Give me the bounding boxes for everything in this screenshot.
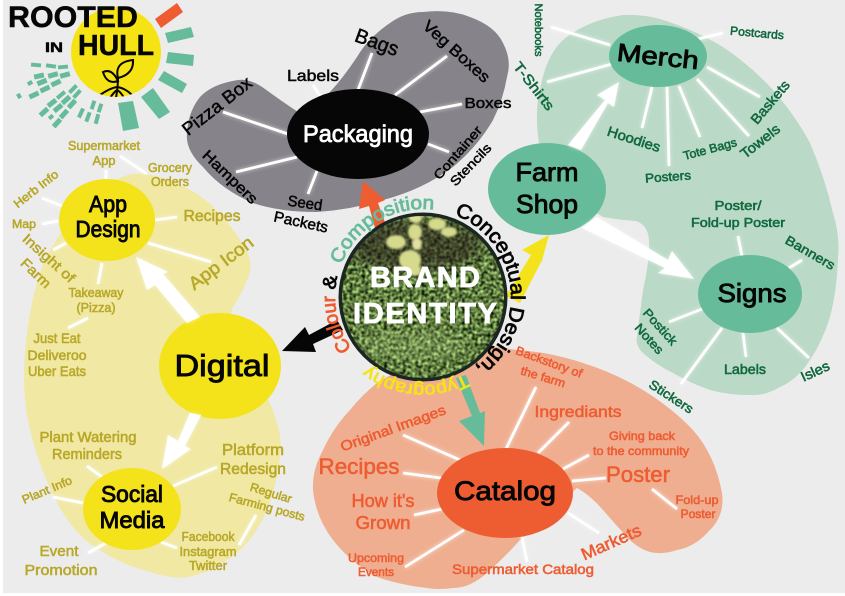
labels: merch: Hoodies [605, 123, 663, 155]
labels: catalog: Fold-up [676, 493, 719, 507]
labels: packaging: Labels [287, 68, 339, 85]
labels: catalog: the farm [519, 364, 567, 390]
connector lines: packaging [223, 53, 462, 194]
labels: packaging: Container [430, 122, 485, 182]
labels: social media: Instagram [180, 544, 236, 559]
labels: social media: Farming posts [228, 490, 306, 524]
labels: merch: Postcards [729, 24, 785, 42]
heading: brand identity: IDENTITY [353, 298, 497, 330]
arrow: brand identity to farm shop [506, 235, 549, 303]
labels: app design: Herb Info [11, 167, 61, 211]
arrow: farm shop to merch [568, 82, 619, 150]
labels: merch: Notebooks [532, 4, 544, 57]
curved label: ampersand: & [322, 276, 338, 290]
labels: merch: Baskets [747, 77, 793, 127]
labels: packaging: Pizza Box [178, 73, 256, 139]
labels: app design: Just Eat [34, 330, 81, 346]
labels: app design: Deliveroo [28, 347, 87, 363]
blob: digital background [24, 173, 281, 578]
labels: social media: Redesign [220, 461, 286, 478]
labels: app design: Orders [151, 174, 189, 189]
node: digital [159, 313, 281, 419]
node: packaging: Packaging [303, 121, 413, 148]
curved ring text [322, 196, 526, 395]
heading: brand identity: BRAND [370, 262, 480, 294]
curved label: typography: Typography [362, 366, 471, 395]
labels: signs: Banners [783, 232, 838, 273]
node: merch: Merch [616, 39, 700, 75]
heading: brand identity [353, 262, 497, 330]
labels: packaging [178, 18, 512, 237]
arrow: digital to social media [162, 413, 201, 469]
node: app design: App [89, 191, 127, 217]
orange sun ray [155, 3, 183, 28]
title text: IN [45, 39, 63, 55]
arrow: brand identity to packaging [359, 181, 386, 228]
connector lines: catalog [403, 387, 677, 567]
labels: social media: Facebook [182, 529, 235, 544]
labels: social media: Plant Watering [40, 430, 136, 446]
panel: farm shop [488, 4, 838, 417]
labels: social media: Event [40, 543, 79, 560]
logo: rooted in hull [8, 1, 194, 131]
labels: merch: Tote Bags [682, 135, 738, 163]
photo of moss plants [340, 210, 506, 380]
labels: catalog: Ingrediants [534, 404, 622, 421]
labels: signs: Notes [632, 321, 666, 357]
arrow: brand identity to digital [282, 320, 343, 352]
node: catalog [437, 448, 573, 538]
labels: social media: Promotion [24, 562, 98, 579]
labels: packaging: Hampers [199, 147, 261, 208]
node: catalog: Catalog [454, 476, 556, 506]
curved label: composition: Composition [331, 196, 434, 262]
labels: social media: Platform [222, 442, 284, 459]
blob: packaging background [187, 11, 509, 212]
labels: social media: Plant Info [20, 473, 74, 507]
arrows connecting the nodes [136, 82, 694, 469]
labels: social media: Reminders [52, 447, 122, 463]
labels: catalog: Poster [606, 462, 670, 487]
node: digital: Digital [174, 348, 270, 383]
labels: app design: Map [12, 217, 36, 231]
small sun ray fragments [16, 63, 103, 128]
labels: app design: Supermarket [68, 138, 140, 153]
labels: catalog: Original Images [338, 402, 448, 454]
labels: catalog: Supermarket Catalog [452, 561, 594, 577]
labels: catalog: Backstory of [514, 343, 585, 381]
labels: app design: Farm [17, 255, 55, 291]
labels: merch [510, 4, 793, 186]
curved label: colour: Colour [324, 296, 350, 353]
labels: packaging: Boxes [464, 95, 512, 112]
labels: packaging: Bags [352, 25, 402, 61]
panel: digital [11, 138, 306, 579]
title text [8, 1, 154, 62]
labels: catalog: Poster [680, 507, 716, 521]
connector lines: digital [42, 156, 256, 553]
labels: signs: Poster/ [714, 198, 762, 213]
node: farm shop: Shop [516, 189, 578, 219]
labels: app design: Insight of [19, 230, 79, 286]
labels: packaging: Seed [286, 193, 323, 214]
node: farm shop: Farm [516, 157, 578, 187]
labels: signs [632, 198, 838, 417]
labels: app design: Recipes [184, 208, 240, 225]
labels: signs: Isles [798, 357, 832, 385]
labels: app design: Grocery [148, 160, 192, 175]
labels: social media [20, 430, 306, 579]
labels: catalog [318, 343, 719, 579]
node: social media: Media [100, 507, 165, 533]
labels: catalog: Upcoming [348, 551, 404, 565]
labels: catalog: Recipes [318, 454, 400, 479]
node: farm shop [488, 143, 606, 235]
node: social media: Social [101, 481, 163, 507]
labels: signs: Postick [640, 306, 680, 349]
node: social media [83, 468, 181, 550]
labels: packaging: Veg Boxes [419, 18, 493, 87]
node: signs [698, 255, 802, 333]
labels: app design: (Pizza) [76, 300, 116, 315]
blob: farm shop background [537, 15, 838, 395]
labels: app design: Uber Eats [28, 363, 86, 379]
node: merch [609, 25, 707, 87]
labels: app design: App Icon [185, 232, 257, 294]
logo sun [71, 7, 161, 97]
node: packaging [287, 89, 429, 179]
labels: signs: Labels [724, 361, 766, 377]
arrow: digital to app design [136, 257, 200, 323]
labels: catalog: Events [358, 565, 394, 579]
central photo: brand identity [338, 210, 508, 382]
photo rim [338, 212, 508, 382]
arrow: brand identity to catalog [456, 375, 485, 446]
panel: packaging [178, 11, 512, 237]
connector lines: farm shop [547, 27, 809, 384]
node: app design: Design [76, 216, 140, 242]
labels: social media: Regular [248, 480, 294, 506]
blob: catalog background [313, 340, 722, 589]
node: app design [59, 179, 155, 261]
labels: app design [11, 138, 257, 379]
labels: merch: Posters [645, 168, 691, 186]
panel: catalog [313, 340, 722, 589]
labels: merch: T-Shirts [510, 59, 558, 113]
labels: catalog: How it's [352, 491, 414, 511]
node: signs: Signs [718, 278, 786, 308]
labels: merch: Towels [737, 121, 783, 161]
labels: social media: Twitter [189, 558, 228, 573]
labels: catalog: Giving back [609, 429, 676, 443]
arrow: farm shop to signs [582, 217, 694, 279]
labels: app design: App [92, 153, 116, 168]
title text: ROOTED [8, 1, 138, 34]
labels: signs: Fold-up Poster [691, 215, 786, 230]
labels: catalog: to the community [593, 444, 689, 458]
labels: signs: Stickers [646, 377, 697, 417]
large sun rays [118, 27, 194, 131]
labels: packaging: Stencils [447, 140, 495, 189]
labels: app design: Takeaway [68, 285, 124, 300]
labels: catalog: Grown [356, 513, 410, 533]
labels: catalog: Markets [578, 521, 644, 564]
title text: HULL [78, 30, 154, 62]
labels: packaging: Packets [272, 208, 330, 237]
icon: sprout [100, 60, 133, 98]
curved label: conceptual design: Conceptual Design, [457, 204, 526, 370]
